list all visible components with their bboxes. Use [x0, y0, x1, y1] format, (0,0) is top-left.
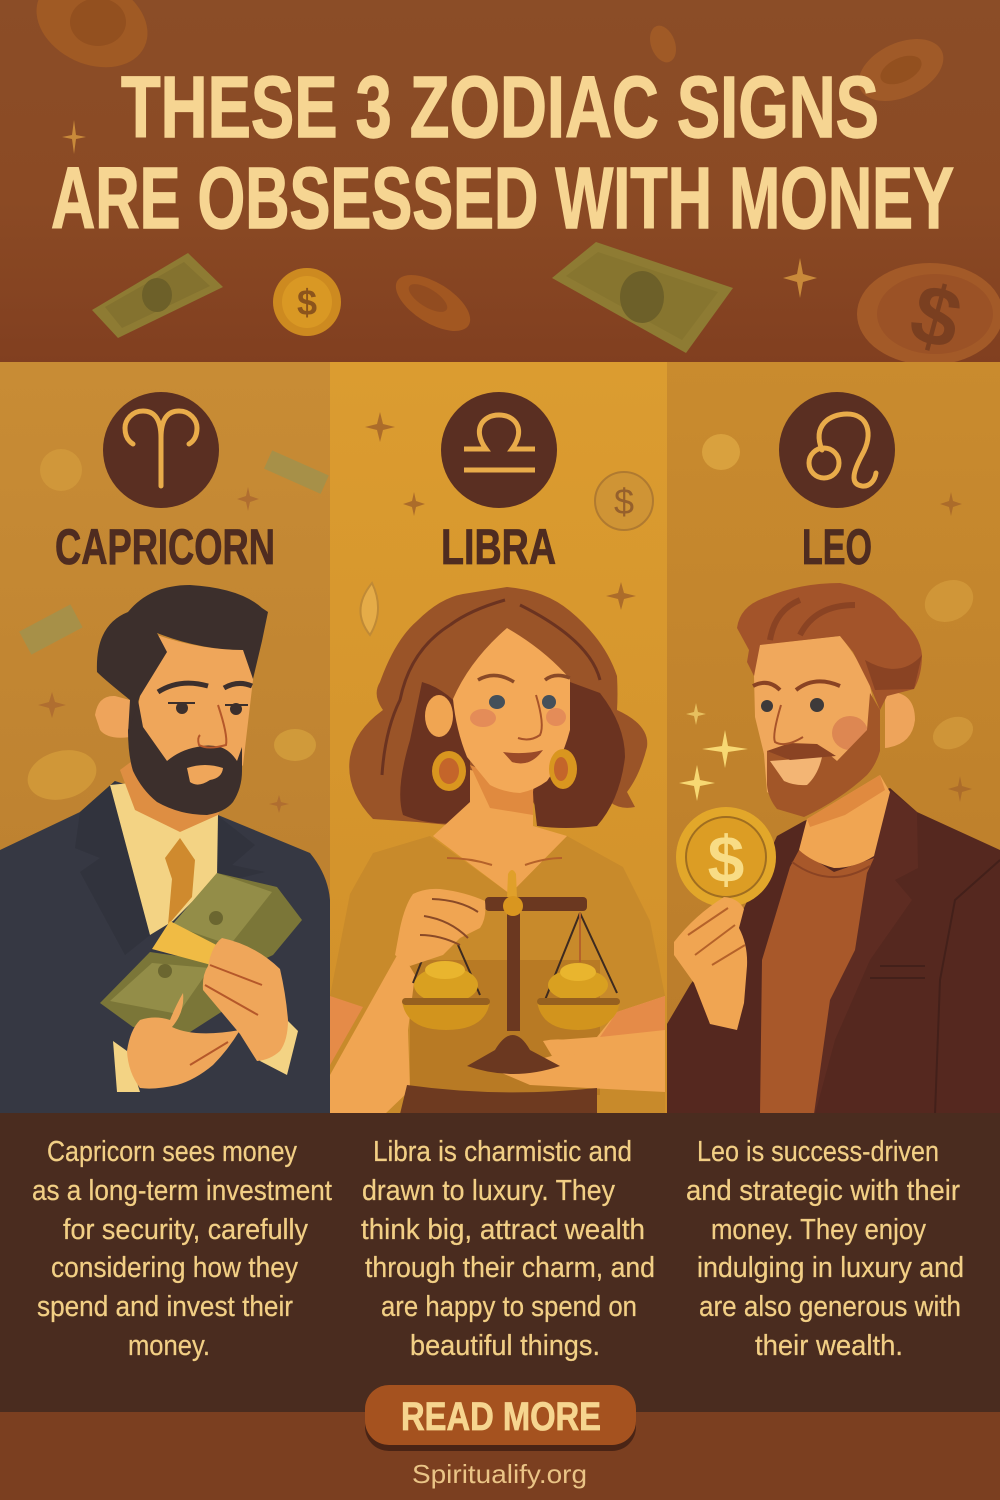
- shirt: [760, 850, 874, 1114]
- icon: Libra sign: [441, 392, 557, 508]
- text: Capricorn description: spend and invest their: [37, 1291, 293, 1323]
- face: [130, 635, 253, 790]
- hand: [674, 897, 747, 1030]
- face: [754, 636, 880, 815]
- beard: [767, 693, 880, 817]
- background coins and sparkles: Leo: [702, 434, 980, 802]
- text: Libra description: beautiful things.: [410, 1330, 600, 1362]
- text: Capricorn description: for security, carefully: [63, 1214, 308, 1246]
- facial features: [478, 675, 570, 682]
- figure: man with money: [0, 585, 330, 1114]
- sparkles: [62, 120, 817, 298]
- button: read more: READ MORE: [401, 1395, 601, 1439]
- text: Capricorn description: [32, 1136, 332, 1362]
- hair: [97, 585, 268, 734]
- decorative coin: small top: [645, 22, 681, 66]
- jacket: [0, 781, 330, 1114]
- eyes and brows: [753, 681, 840, 690]
- text: Capricorn description: money.: [128, 1330, 210, 1362]
- text: Libra description: drawn to luxury. They: [362, 1175, 615, 1207]
- decorative banknote: left: [92, 253, 223, 338]
- decorative coin: top left: [22, 0, 162, 85]
- skirt: [400, 1085, 597, 1114]
- icon: Leo sign: [779, 392, 895, 508]
- chest and neck: [433, 770, 567, 894]
- panel: description band: [0, 1113, 1000, 1412]
- ear: [885, 692, 915, 748]
- icon: Capricorn sign: [103, 392, 219, 508]
- text: Leo description: their wealth.: [755, 1330, 903, 1362]
- earrings: [432, 749, 577, 791]
- money stack: [100, 873, 302, 1034]
- decorative coin: gold dollar: $: [297, 282, 317, 323]
- title: [51, 59, 954, 247]
- decorative coin: top right: [849, 27, 953, 113]
- hands: [395, 889, 590, 1056]
- panel: Capricorn: [0, 362, 330, 1114]
- hair: [349, 587, 647, 827]
- button: read more: [365, 1385, 636, 1451]
- text: Libra description: [361, 1136, 655, 1362]
- decorative coin: large dollar right: [857, 263, 1000, 368]
- heading: Leo: LEO: [802, 519, 872, 575]
- text: Libra description: think big, attract wealth: [361, 1214, 645, 1246]
- gold coin: $: [708, 822, 744, 896]
- header panel: [0, 0, 1000, 368]
- text: Libra description: through their charm, and: [365, 1252, 655, 1284]
- text: Leo description: are also generous with: [699, 1291, 961, 1323]
- eyes and nose: [158, 683, 252, 692]
- decorative banknote: centre: [552, 242, 733, 353]
- neck: [799, 775, 890, 868]
- footer site name: Spiritualify.org: [412, 1459, 587, 1489]
- decorative coin: tilted: [387, 264, 479, 342]
- text: Leo description: and strategic with their: [686, 1175, 960, 1207]
- neck: [120, 740, 240, 832]
- hair: [737, 583, 922, 710]
- sparkles near coin: [679, 703, 748, 801]
- text: Leo description: [686, 1136, 964, 1362]
- figure: man with coin: [667, 583, 1000, 1114]
- text: Capricorn description: considering how they: [51, 1252, 298, 1284]
- panel: Leo: [667, 362, 1000, 1114]
- decorative coin: large dollar right: $: [901, 265, 971, 368]
- decorative coin: gold dollar: [273, 268, 341, 336]
- beard: [128, 700, 242, 815]
- face: [453, 628, 570, 793]
- forearms: [330, 950, 665, 1114]
- text: Capricorn description: as a long-term investment: [32, 1175, 332, 1207]
- jacket: [667, 788, 1000, 1114]
- text: Libra description: Libra is charmistic and: [373, 1136, 632, 1168]
- text: Libra description: are happy to spend on: [381, 1291, 637, 1323]
- background coins and sparkles: Libra: $: [614, 481, 634, 522]
- figure: woman with scales: [330, 587, 665, 1114]
- hands and cuffs: [113, 938, 298, 1092]
- text: Leo description: indulging in luxury and: [697, 1252, 964, 1284]
- heading: Libra: LIBRA: [441, 519, 556, 575]
- panel: Libra: [330, 362, 667, 1114]
- balance scale: [402, 870, 620, 1074]
- gold coin: [676, 807, 776, 907]
- blouse: [330, 836, 665, 1114]
- tie: [165, 838, 195, 925]
- text: Capricorn description: Capricorn sees money: [47, 1136, 297, 1168]
- shirt: [110, 780, 218, 935]
- ear: [95, 696, 130, 738]
- background coins and sparkles: Libra: [360, 412, 653, 635]
- text: Leo description: Leo is success-driven: [697, 1136, 939, 1168]
- text: Leo description: money. They enjoy: [711, 1214, 926, 1246]
- background coins and sparkles: Capricorn: [19, 449, 329, 813]
- shirt collar: [792, 862, 870, 877]
- heading: Capricorn: CAPRICORN: [55, 519, 275, 575]
- ear: [425, 695, 453, 737]
- footer band: [0, 1412, 1000, 1500]
